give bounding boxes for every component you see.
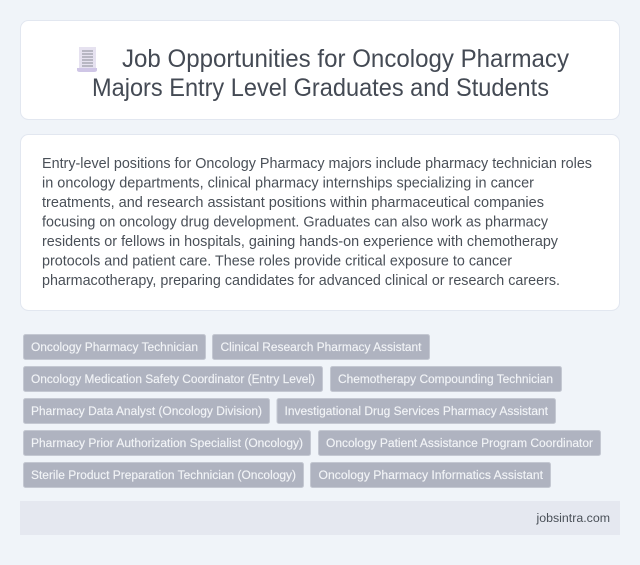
tag — [24, 462, 304, 488]
heading: Job Opportunities for Oncology Pharmacy — [122, 45, 569, 73]
tag — [24, 398, 270, 424]
tag: Investigational Drug Services Pharmacy Assistant — [284, 404, 549, 418]
tag — [277, 398, 556, 424]
panel: job tags — [24, 334, 600, 488]
text block: description — [42, 156, 592, 289]
heading — [92, 45, 569, 102]
tag: Sterile Product Preparation Technician (Oncology) — [31, 468, 296, 482]
tag — [24, 430, 310, 456]
tag: Pharmacy Data Analyst (Oncology Division) — [31, 404, 262, 418]
tag — [212, 334, 430, 360]
text block: description: focusing on oncology drug development. Graduates can also work as pharmacy — [42, 214, 549, 230]
tag: Clinical Research Pharmacy Assistant — [220, 340, 422, 354]
text block: description: Entry-level positions for Oncology Pharmacy majors include pharmacy technician roles — [42, 156, 592, 172]
tag — [318, 430, 600, 456]
text block: description: in oncology departments, clinical pharmacy internships specializing in cancer — [42, 176, 534, 192]
tag — [24, 366, 322, 392]
text block: description: protocols and patient care. These roles provide critical exposure to cancer — [42, 254, 512, 270]
text block: description: pharmacotherapy, preparing candidates for advanced clinical or research careers. — [42, 273, 560, 289]
tag — [24, 334, 206, 360]
panel: title card — [20, 20, 620, 120]
tag — [310, 462, 550, 488]
tag: Oncology Pharmacy Informatics Assistant — [318, 468, 544, 482]
text block: description: treatments, and research assistant positions within pharmaceutical companies — [42, 195, 544, 211]
text block: description: residents or fellows in hospitals, gaining hands-on experience with chemotherapy — [42, 234, 559, 250]
heading: Majors Entry Level Graduates and Students — [92, 74, 549, 102]
icon: document scroll — [77, 47, 97, 72]
tag: Chemotherapy Compounding Technician — [338, 372, 553, 386]
tag — [330, 366, 562, 392]
footer bar — [20, 501, 620, 535]
tag: Oncology Pharmacy Technician — [31, 340, 198, 354]
tag: Oncology Patient Assistance Program Coordinator — [326, 436, 593, 450]
footer text: source: jobsintra.com — [535, 511, 610, 525]
tag: Oncology Medication Safety Coordinator (Entry Level) — [31, 372, 315, 386]
panel: description card — [20, 134, 620, 310]
tag: Pharmacy Prior Authorization Specialist (Oncology) — [31, 436, 303, 450]
